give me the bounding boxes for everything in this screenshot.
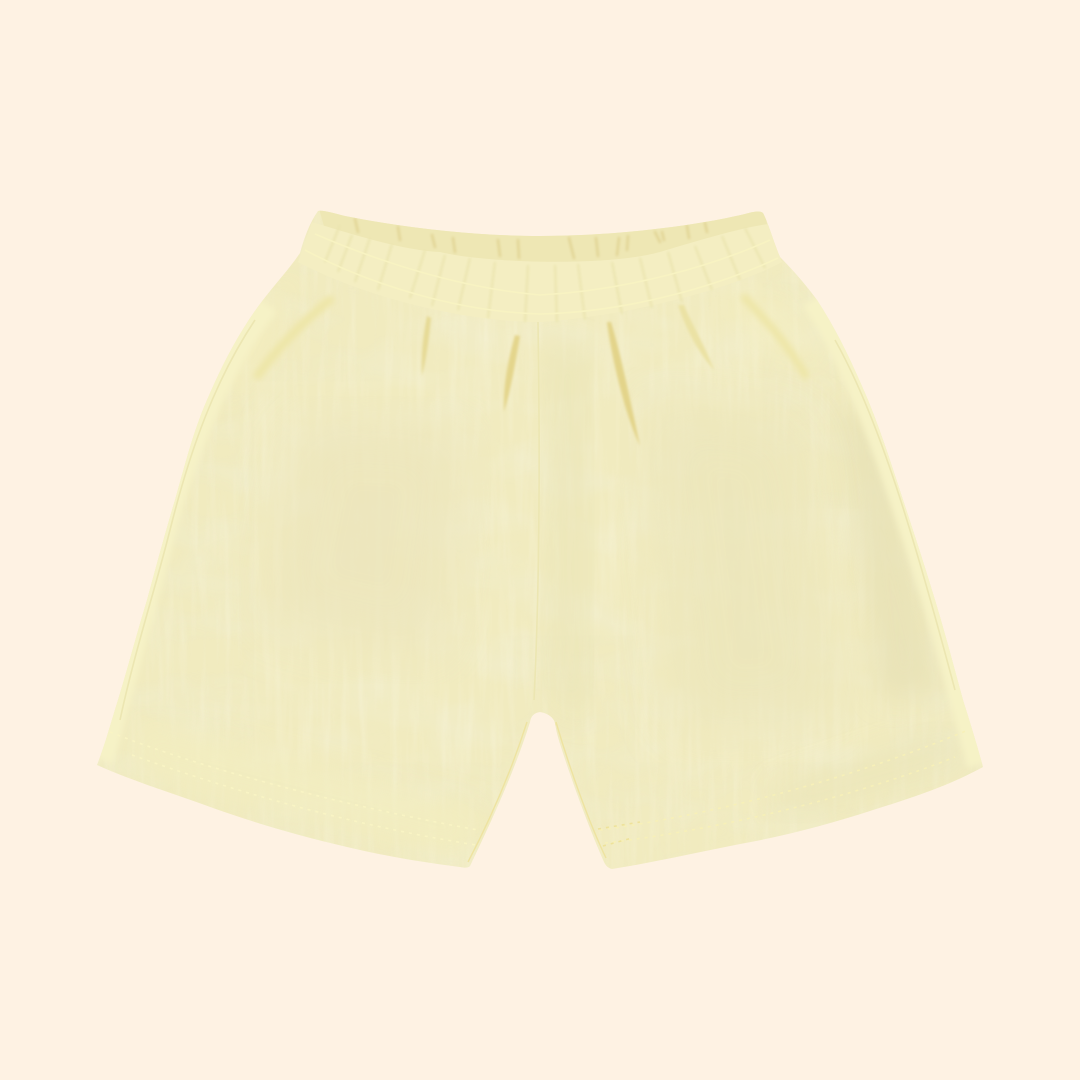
waistband front <box>324 224 768 272</box>
soft shading on the legs <box>308 218 940 855</box>
elastic gather folds <box>325 225 765 322</box>
left leg hem stitching <box>110 732 478 845</box>
illustration: linen shorts <box>97 210 983 869</box>
shorts body with fabric texture <box>80 190 1000 890</box>
gathers below waistband <box>422 305 714 446</box>
lighter side panels along the outer edges <box>103 300 978 765</box>
soft pocket folds <box>258 298 805 375</box>
inseam lines <box>468 722 606 862</box>
waistband inner back <box>320 210 766 262</box>
panel: cream background <box>97 210 983 869</box>
side pocket seams <box>120 320 955 720</box>
crotch fold <box>555 723 556 726</box>
waistband inner gathers <box>355 219 707 258</box>
waistband stitching <box>324 240 765 314</box>
right leg hem stitching <box>598 730 968 846</box>
